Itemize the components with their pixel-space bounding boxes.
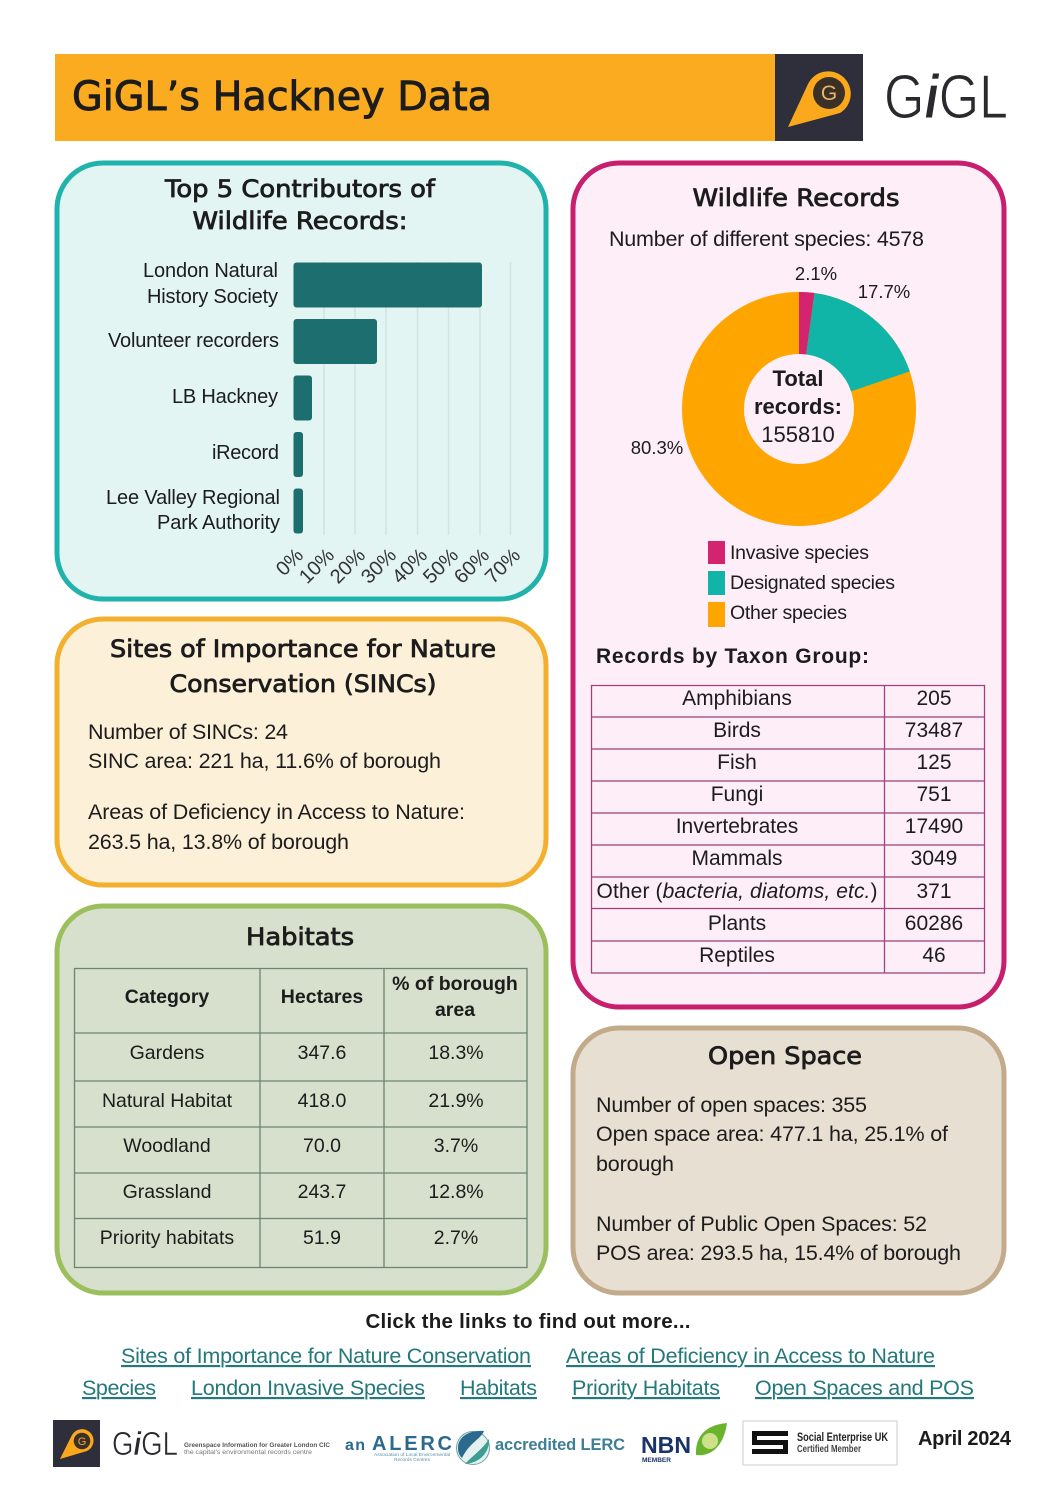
footer logo: Social Enterprise UK [743,1421,897,1465]
table: habitats: 70.0 [303,1135,341,1157]
table: habitats: Woodland [123,1135,211,1157]
table: taxon group: Amphibians [682,687,792,710]
bar chart: contributors: Volunteer recorders [108,330,279,352]
table: taxon group: Other (bacteria, diatoms, etc.) [596,880,878,903]
links: Habitats [460,1376,537,1400]
heading: taxon group: Records by Taxon Group: [596,645,869,668]
table: taxon group: Birds [713,719,761,742]
table: habitats: 21.9% [428,1090,484,1112]
heading: open space: Open Space [708,1042,862,1070]
text: SINC figures [88,720,465,854]
footer logo: ALERC: an [345,1437,365,1454]
table: taxon group [591,685,985,974]
donut chart: records: Total [773,366,823,391]
legend: donut: Designated species [730,572,895,594]
table: taxon group: Fungi [711,783,763,806]
text: open space figures: Number of open spaces: 355 [596,1093,867,1117]
table: taxon group: 73487 [905,719,963,742]
bar chart: contributors: 10% [295,544,339,588]
table: habitats: Category [125,986,209,1008]
footer logo: GiGL: the capital's environmental records centre [184,1450,313,1456]
heading: contributors: Wildlife Records: [192,207,408,235]
table: taxon group: 46 [922,944,946,967]
heading: contributors: Top 5 Contributors of [164,175,436,203]
title: GiGL’s Hackney Data [72,74,492,120]
logo: GiGL pin icon [775,54,863,141]
table: taxon group: 60286 [905,912,963,935]
bar chart: contributors: 0% [272,544,308,580]
footer logo: ALERC: ALERC [372,1433,452,1455]
bar chart: contributors: 40% [388,544,432,588]
table: habitats: 243.7 [298,1181,346,1203]
logo: GiGL pin icon: G [821,82,837,105]
heading: wildlife records: Wildlife Records [692,184,900,212]
table: habitats: Priority habitats [100,1227,234,1249]
header banner [55,54,776,141]
table: taxon group: Reptiles [699,944,775,967]
heading: habitats: Habitats [246,923,354,951]
links: Sites of Importance for Nature Conservation [121,1344,531,1368]
heading: SINCs: Conservation (SINCs) [170,670,436,698]
table: habitats [74,968,528,1268]
donut chart: records: 17.7% [858,281,910,302]
bar chart: contributors [106,260,525,588]
table: taxon group: 125 [916,751,952,774]
bar chart: contributors: 50% [419,544,463,588]
logo: GiGL wordmark: GiGL [884,63,1008,132]
table: taxon group: 17490 [905,815,963,838]
text: open space figures: POS area: 293.5 ha, 15.4% of borough [596,1241,961,1265]
bar chart: contributors: iRecord [212,442,279,464]
table: habitats: Gardens [130,1042,205,1064]
footer logo: NBN: NBN [641,1432,691,1458]
footer logo: GiGL: G [78,1436,86,1448]
legend: donut: Other species [730,602,847,624]
bar chart: contributors: 60% [450,544,494,588]
footer logo: ALERC: Records Centres [394,1457,431,1462]
table: taxon group: 751 [916,783,952,806]
table: habitats: 3.7% [434,1135,478,1157]
table: taxon group: Mammals [691,847,783,870]
panel: habitats [57,906,546,1293]
footer logo: Social Enterprise UK: Certified Member [797,1444,861,1455]
text: open space figures: Number of Public Open Spaces: 52 [596,1212,927,1236]
table: habitats: 51.9 [303,1227,341,1249]
panel: top 5 contributors [57,163,546,599]
links [82,1344,974,1400]
donut chart: records: 155810 [761,422,835,447]
table: taxon group: 3049 [911,847,957,870]
text: SINC figures: Number of SINCs: 24 [88,720,288,744]
bar chart: contributors: History Society [147,286,278,308]
footer logo: ALERC: accredited LERC [495,1436,625,1454]
bar chart: contributors: London Natural [143,260,278,282]
table: habitats: 18.3% [428,1042,484,1064]
table: habitats: Grassland [123,1181,211,1203]
heading: SINCs: Sites of Importance for Nature [110,635,496,663]
bar chart: contributors: 30% [357,544,401,588]
table: habitats: 347.6 [298,1042,346,1064]
table: taxon group: Plants [708,912,766,935]
links: Areas of Deficiency in Access to Nature [566,1344,935,1368]
footer logo: ALERC: Association of Local Environmental [374,1452,450,1457]
date: April 2024 [918,1428,1012,1450]
footer logo: GiGL: Greenspace Information for Greater London CIC [184,1442,330,1449]
legend: donut: Invasive species [730,542,869,564]
text: SINC figures: Areas of Deficiency in Access to Nature: [88,800,465,824]
table: habitats: 12.8% [428,1181,484,1203]
table: taxon group: 371 [916,880,952,903]
table: taxon group: 205 [916,687,952,710]
table: taxon group: Fish [717,751,757,774]
donut chart: records: 80.3% [631,437,683,458]
footer logo: GiGL: GiGL [112,1425,178,1462]
panel: SINCs [57,619,546,885]
bar chart: contributors: LB Hackney [172,386,278,408]
table: taxon group: Invertebrates [676,815,798,838]
text: open space figures [596,1093,961,1265]
table: habitats: area [435,999,475,1021]
footer logo: Social Enterprise UK: Social Enterprise UK [797,1432,889,1444]
footer logo: NBN [641,1423,727,1464]
text: links intro: Click the links to find out more... [366,1310,690,1333]
table: habitats: 418.0 [298,1090,347,1112]
bar chart: contributors: 20% [326,544,370,588]
table: habitats: Natural Habitat [102,1090,233,1112]
donut chart: records: 2.1% [795,263,837,284]
bar chart: contributors: Park Authority [157,512,280,534]
heading: contributors [164,175,436,235]
text: open space figures: borough [596,1152,674,1176]
footer logo: NBN: MEMBER [642,1458,672,1464]
text: open space figures: Open space area: 477.1 ha, 25.1% of [596,1122,948,1146]
donut chart: records [631,263,916,526]
bar chart: contributors: Lee Valley Regional [106,487,280,509]
table: habitats: Hectares [281,986,363,1008]
table: habitats: 2.7% [434,1227,478,1249]
links: Species [82,1376,156,1400]
panel: wildlife records [573,163,1004,1007]
links: London Invasive Species [191,1376,425,1400]
footer logo: GiGL [53,1420,330,1467]
text: SINC figures: 263.5 ha, 13.8% of borough [88,830,349,854]
links: Priority Habitats [572,1376,720,1400]
legend: donut [708,541,895,627]
heading: SINCs [110,635,496,698]
panel: open space [573,1028,1004,1293]
text: species count: Number of different species: 4578 [609,227,924,251]
footer logo: ALERC [345,1431,625,1464]
text: SINC figures: SINC area: 221 ha, 11.6% of borough [88,749,441,773]
bar chart: contributors: 70% [481,544,525,588]
links: Open Spaces and POS [755,1376,974,1400]
table: habitats: % of borough [392,973,518,995]
donut chart: records: records: [754,394,842,419]
